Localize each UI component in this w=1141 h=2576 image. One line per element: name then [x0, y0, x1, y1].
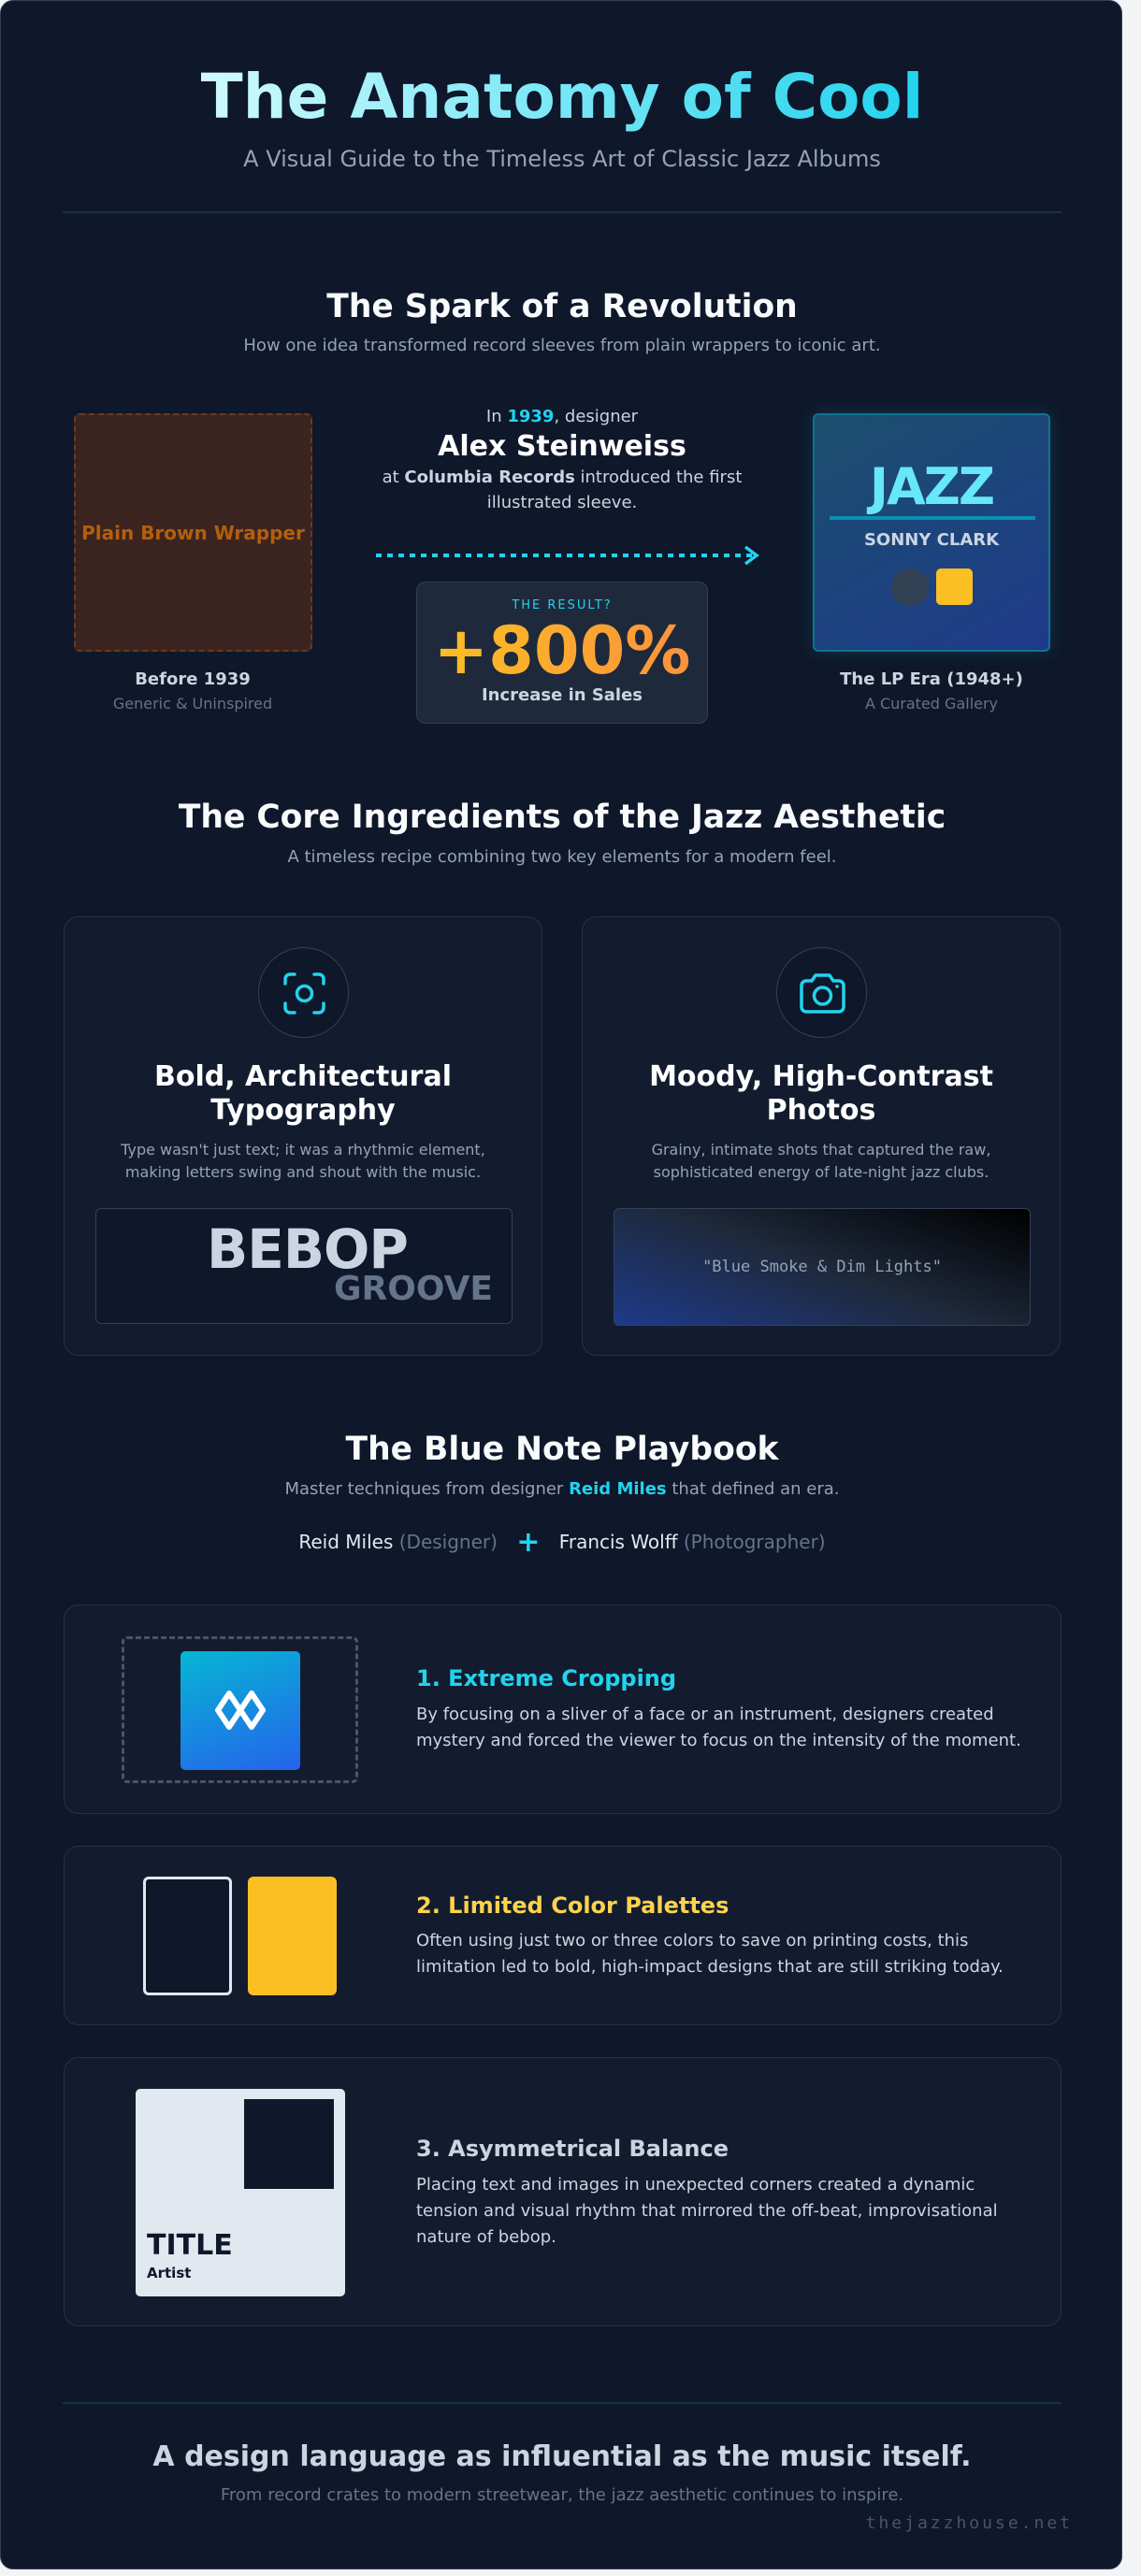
panel: photos: Photos	[767, 1094, 875, 1127]
subheading: blue note: Master techniques from designer Reid Miles that defined an era.	[284, 1479, 840, 1499]
caption: LP era: A Curated Gallery	[865, 695, 998, 712]
subheading: spark: How one idea transformed record sleeves from plain wrappers to iconic art.	[243, 336, 881, 355]
caption: before 1939: Before 1939	[135, 669, 251, 689]
panel: asymmetrical balance: Placing text and images in unexpected corners created a dynamic tension and visual rhythm that mirrored the off-beat, improvisational nature of bebop.	[416, 2175, 998, 2247]
caption: before 1939	[113, 669, 272, 712]
result box: Increase in Sales	[482, 685, 643, 705]
panel: asymmetrical balance	[64, 2057, 1062, 2326]
bebop sample: GROOVE	[334, 1270, 493, 1308]
icon: cropped image	[122, 1636, 358, 1783]
title: The Anatomy of Cool	[201, 61, 923, 133]
album: LP era	[813, 413, 1050, 652]
collaborators row: Reid Miles (Designer) + Francis Wolff (Photographer)	[298, 1526, 826, 1559]
panel: typography: Type wasn't just text; it was a rhythmic element,	[121, 1141, 485, 1158]
icon: asymmetric layout: TITLE	[147, 2229, 233, 2262]
result box	[416, 582, 708, 724]
caption: LP era: The LP Era (1948+)	[840, 669, 1023, 689]
icon: focus	[258, 947, 349, 1038]
panel: photos	[582, 916, 1061, 1356]
photo sample	[614, 1208, 1031, 1326]
panel: extreme cropping: By focusing on a sliver of a face or an instrument, designers created mystery and forced the viewer to focus on the intensity of the moment.	[416, 1705, 1021, 1750]
panel: photos: sophisticated energy of late-night jazz clubs.	[654, 1163, 989, 1181]
panel: limited color: Often using just two or three colors to save on printing costs, this limitation led to bold, high-impact designs that are still striking today.	[416, 1931, 1004, 1977]
bebop sample: BEBOP	[207, 1217, 408, 1281]
panel: photos: Moody, High-Contrast	[649, 1060, 993, 1093]
panel: typography: Typography	[210, 1094, 396, 1127]
bebop sample	[95, 1208, 513, 1324]
arrow: dashed	[376, 546, 759, 565]
heading: blue note: The Blue Note Playbook	[346, 1431, 778, 1468]
text: Steinweiss intro: at Columbia Records introduced the first	[383, 468, 742, 487]
panel: typography: Bold, Architectural	[154, 1060, 452, 1093]
album: LP era: SONNY CLARK	[864, 530, 999, 550]
icon: color swatches	[143, 1877, 337, 1995]
brown wrapper: Plain Brown Wrapper	[81, 522, 305, 544]
result box: THE RESULT?	[512, 598, 613, 612]
photo sample: "Blue Smoke & Dim Lights"	[702, 1258, 942, 1276]
text: Steinweiss intro: In 1939, designer	[486, 407, 638, 426]
subtitle: A Visual Guide to the Timeless Art of Classic Jazz Albums	[243, 146, 881, 172]
panel: limited color	[64, 1846, 1062, 2025]
result box: +800%	[434, 612, 690, 689]
heading: spark: The Spark of a Revolution	[326, 288, 798, 325]
panel: limited color: 2. Limited Color Palettes	[416, 1892, 729, 1919]
brown wrapper	[74, 413, 312, 652]
album: LP era: JAZZ	[870, 457, 993, 516]
subheading: core: A timeless recipe combining two key elements for a modern feel.	[287, 847, 837, 867]
panel: asymmetrical balance: 3. Asymmetrical Balance	[416, 2136, 729, 2162]
text: Steinweiss intro: Alex Steinweiss	[438, 430, 686, 463]
caption: LP era	[840, 669, 1023, 712]
footer subtext: From record crates to modern streetwear, the jazz aesthetic continues to inspire.	[221, 2485, 903, 2505]
icon: asymmetric layout	[136, 2089, 345, 2296]
panel: extreme cropping	[64, 1605, 1062, 1814]
footer heading: A design language as influential as the music itself.	[152, 2440, 972, 2473]
caption: before 1939: Generic & Uninspired	[113, 695, 272, 712]
panel: typography	[64, 916, 542, 1356]
panel: typography: making letters swing and shout with the music.	[125, 1163, 481, 1181]
icon: asymmetric layout: Artist	[147, 2265, 191, 2281]
footer url: thejazzhouse.net	[866, 2513, 1073, 2533]
heading: core ingredients: The Core Ingredients of the Jazz Aesthetic	[179, 799, 946, 836]
icon: camera	[776, 947, 867, 1038]
panel: photos: Grainy, intimate shots that captured the raw,	[652, 1141, 990, 1158]
text: Steinweiss intro: illustrated sleeve.	[487, 493, 637, 512]
text: Steinweiss intro	[383, 407, 742, 512]
panel: extreme cropping: 1. Extreme Cropping	[416, 1665, 676, 1691]
